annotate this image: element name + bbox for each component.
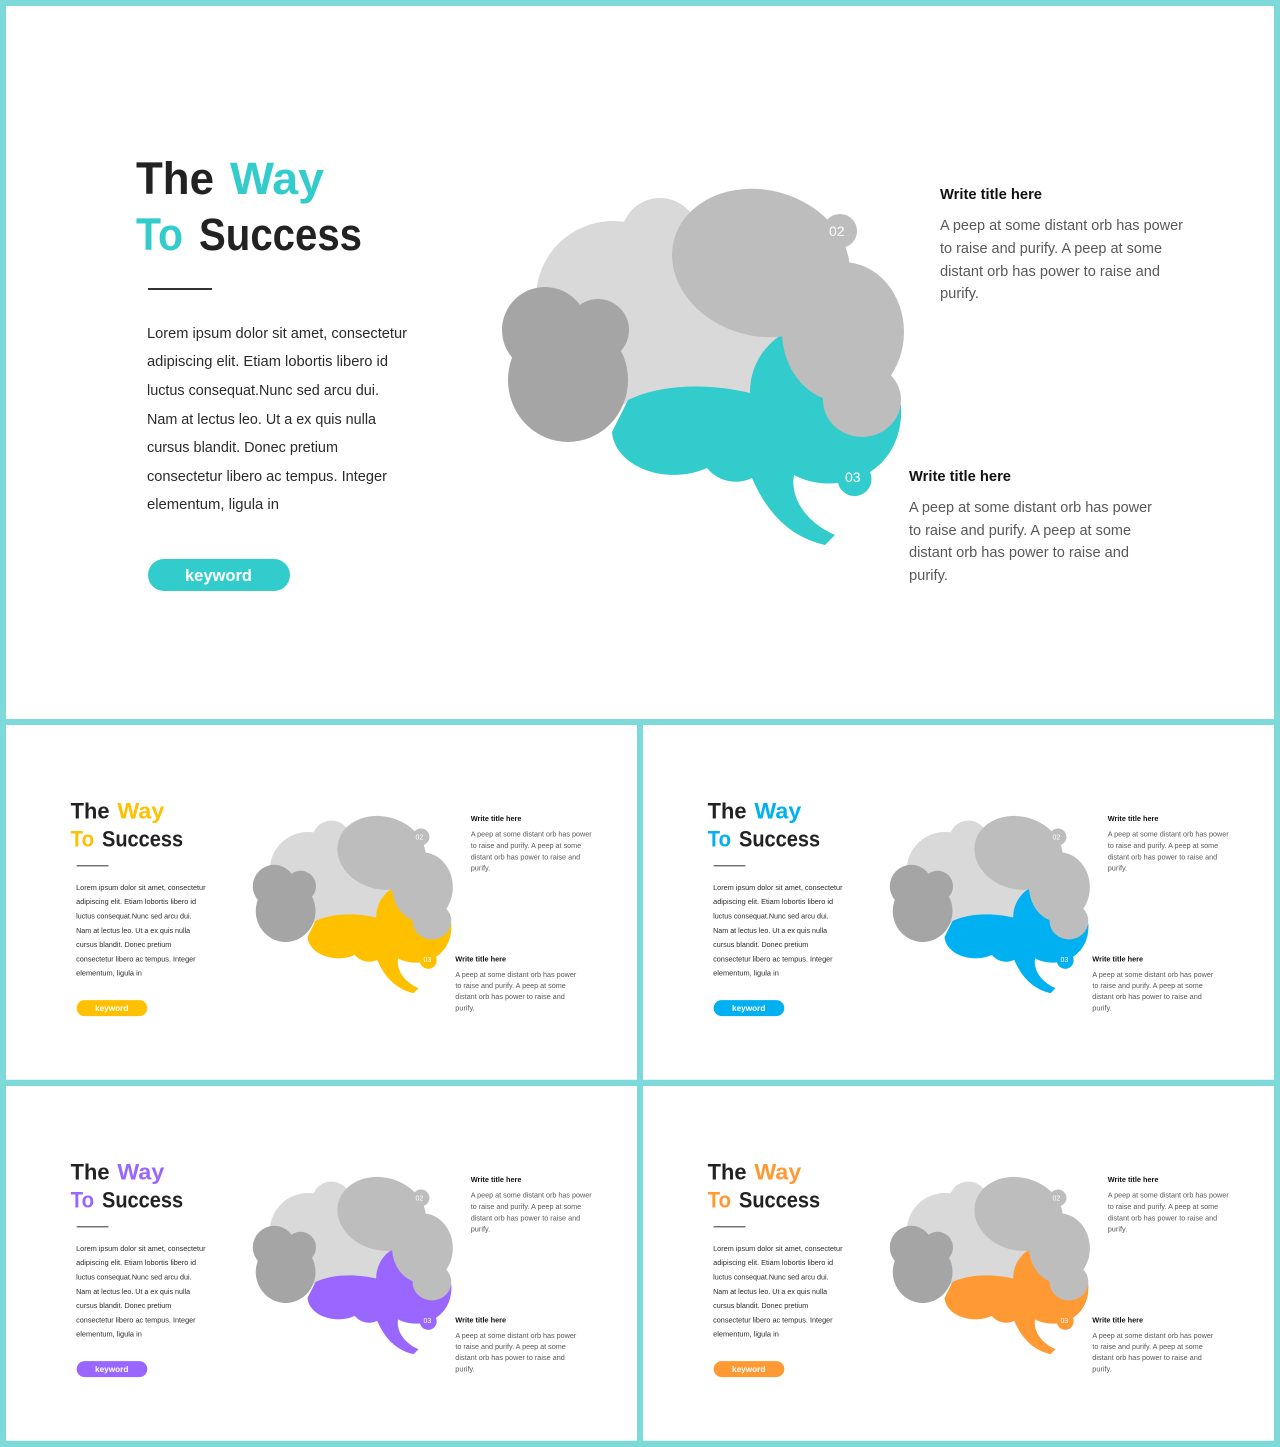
callout: 02: A peep at some distant orb has power — [1108, 1190, 1229, 1199]
heading — [708, 1160, 820, 1212]
callout: 03: A peep at some distant orb has power — [909, 500, 1152, 516]
callout: 03: distant orb has power to raise and — [455, 992, 565, 1001]
callout: 03 — [455, 1315, 577, 1374]
callout: 03: purify. — [1092, 1365, 1112, 1374]
callout: 02: purify. — [940, 286, 979, 302]
body text: cursus blandit. Donec pretium — [147, 440, 338, 456]
keyword button — [77, 1000, 147, 1016]
body text: cursus blandit. Donec pretium — [713, 940, 808, 949]
keyword button — [148, 559, 290, 591]
callout: 02 — [471, 1175, 592, 1233]
brain diagram: 02 — [1053, 1195, 1060, 1202]
callout: 03: to raise and purify. A peep at some — [1092, 981, 1203, 990]
callout: 02: purify. — [1108, 1224, 1127, 1233]
heading — [708, 799, 820, 851]
body text: consectetur libero ac tempus. Integer — [76, 1315, 196, 1324]
callout: 02: distant orb has power to raise and — [940, 264, 1160, 280]
heading: To — [71, 1187, 94, 1212]
callout: 03: distant orb has power to raise and — [1092, 992, 1202, 1001]
callout: 02: Write title here — [940, 187, 1042, 203]
body text — [713, 1244, 843, 1338]
brain diagram: 02 — [1053, 834, 1060, 841]
heading — [71, 799, 183, 851]
callout: 03 — [1092, 954, 1214, 1013]
brain diagram — [253, 806, 453, 993]
callout: 02: purify. — [1108, 863, 1127, 872]
heading: Way — [230, 153, 324, 204]
keyword button — [714, 1361, 784, 1377]
body text: adipiscing elit. Etiam lobortis libero id — [76, 1258, 196, 1267]
body text: Lorem ipsum dolor sit amet, consectetur — [713, 1244, 843, 1253]
callout: 03: Write title here — [455, 1315, 506, 1324]
keyword button: keyword — [95, 1003, 128, 1013]
callout: 03: Write title here — [1092, 1315, 1143, 1324]
body text: Lorem ipsum dolor sit amet, consectetur — [76, 883, 206, 892]
body text — [76, 883, 206, 977]
callout: 02: A peep at some distant orb has power — [471, 829, 592, 838]
callout: 03: purify. — [455, 1004, 475, 1013]
brain diagram — [890, 806, 1090, 993]
brain diagram: 03 — [845, 469, 861, 485]
heading: To — [71, 826, 94, 851]
callout: 03: A peep at some distant orb has power — [455, 1331, 577, 1340]
heading: Success — [739, 1187, 820, 1212]
heading: Success — [739, 826, 820, 851]
callout: 02: to raise and purify. A peep at some — [471, 1202, 581, 1211]
body text: luctus consequat.Nunc sed arcu dui. — [76, 1273, 192, 1282]
callout: 02 — [1108, 814, 1229, 872]
callout: 02: Write title here — [471, 814, 521, 823]
callout: 02: A peep at some distant orb has power — [1108, 829, 1229, 838]
callout: 02: to raise and purify. A peep at some — [1108, 841, 1218, 850]
panel: orange slide — [643, 1086, 1274, 1441]
callout: 02: purify. — [471, 863, 490, 872]
callout: 02: Write title here — [1108, 814, 1158, 823]
keyword button: keyword — [185, 566, 252, 585]
callout: 03: to raise and purify. A peep at some — [1092, 1342, 1203, 1351]
heading: Way — [117, 1160, 165, 1185]
callout: 03: purify. — [455, 1365, 475, 1374]
brain diagram — [890, 1167, 1090, 1354]
body text: Lorem ipsum dolor sit amet, consectetur — [147, 326, 407, 342]
heading: The — [136, 153, 214, 204]
callout: 02: purify. — [471, 1224, 490, 1233]
body text: elementum, ligula in — [713, 968, 779, 977]
callout: 02 — [940, 187, 1183, 302]
brain diagram: 03 — [1060, 1318, 1068, 1325]
panel: blue slide — [643, 725, 1274, 1080]
keyword button — [714, 1000, 784, 1016]
heading: The — [708, 799, 746, 824]
heading — [136, 153, 362, 260]
brain diagram: 02 — [416, 1195, 423, 1202]
body text: Nam at lectus leo. Ut a ex quis nulla — [76, 926, 190, 935]
panel: yellow slide — [6, 725, 637, 1080]
heading: The — [71, 1160, 109, 1185]
body text: adipiscing elit. Etiam lobortis libero id — [713, 1258, 833, 1267]
keyword button: keyword — [732, 1003, 765, 1013]
callout: 03 — [455, 954, 577, 1013]
body text: cursus blandit. Donec pretium — [76, 940, 171, 949]
body text: luctus consequat.Nunc sed arcu dui. — [713, 1273, 829, 1282]
brain diagram: 02 — [829, 223, 845, 239]
panel: purple slide — [6, 1086, 637, 1441]
body text: adipiscing elit. Etiam lobortis libero id — [147, 354, 388, 370]
body text: adipiscing elit. Etiam lobortis libero id — [76, 897, 196, 906]
callout: 03: Write title here — [909, 469, 1011, 485]
callout: 03 — [909, 469, 1152, 584]
callout: 02: distant orb has power to raise and — [1108, 1213, 1217, 1222]
callout: 03: distant orb has power to raise and — [909, 545, 1129, 561]
panel: main teal slide — [6, 6, 1274, 719]
body text: Lorem ipsum dolor sit amet, consectetur — [76, 1244, 206, 1253]
body text: elementum, ligula in — [76, 968, 142, 977]
body text: adipiscing elit. Etiam lobortis libero id — [713, 897, 833, 906]
callout: 02: to raise and purify. A peep at some — [471, 841, 581, 850]
body text: consectetur libero ac tempus. Integer — [713, 1315, 833, 1324]
body text: luctus consequat.Nunc sed arcu dui. — [713, 912, 829, 921]
callout: 02: A peep at some distant orb has power — [940, 218, 1183, 234]
keyword button: keyword — [732, 1364, 765, 1374]
body text — [713, 883, 843, 977]
keyword button — [77, 1361, 147, 1377]
callout: 03: distant orb has power to raise and — [1092, 1353, 1202, 1362]
callout: 03: to raise and purify. A peep at some — [455, 981, 566, 990]
callout: 03: A peep at some distant orb has power — [1092, 1331, 1214, 1340]
body text — [147, 326, 407, 513]
callout: 02: Write title here — [471, 1175, 521, 1184]
callout: 03: Write title here — [1092, 954, 1143, 963]
callout: 02: distant orb has power to raise and — [471, 852, 580, 861]
body text: luctus consequat.Nunc sed arcu dui. — [147, 383, 379, 399]
heading: Way — [754, 1160, 802, 1185]
callout: 02 — [471, 814, 592, 872]
brain diagram: 03 — [423, 1318, 431, 1325]
callout: 02: to raise and purify. A peep at some — [1108, 1202, 1218, 1211]
body text: Nam at lectus leo. Ut a ex quis nulla — [76, 1287, 190, 1296]
callout: 03: to raise and purify. A peep at some — [455, 1342, 566, 1351]
body text: Nam at lectus leo. Ut a ex quis nulla — [713, 926, 827, 935]
body text: luctus consequat.Nunc sed arcu dui. — [76, 912, 192, 921]
brain diagram — [502, 169, 904, 545]
body text: consectetur libero ac tempus. Integer — [713, 954, 833, 963]
heading: To — [708, 1187, 731, 1212]
callout: 02: to raise and purify. A peep at some — [940, 241, 1162, 257]
heading: The — [708, 1160, 746, 1185]
brain diagram: 02 — [416, 834, 423, 841]
callout: 03: distant orb has power to raise and — [455, 1353, 565, 1362]
body text: consectetur libero ac tempus. Integer — [76, 954, 196, 963]
callout: 03: to raise and purify. A peep at some — [909, 523, 1131, 539]
brain diagram: 03 — [1060, 957, 1068, 964]
body text: Lorem ipsum dolor sit amet, consectetur — [713, 883, 843, 892]
heading: To — [136, 209, 183, 260]
heading — [71, 1160, 183, 1212]
body text: consectetur libero ac tempus. Integer — [147, 469, 387, 485]
callout: 03: purify. — [1092, 1004, 1112, 1013]
body text: cursus blandit. Donec pretium — [713, 1301, 808, 1310]
callout: 02: distant orb has power to raise and — [471, 1213, 580, 1222]
callout: 03: A peep at some distant orb has power — [1092, 970, 1214, 979]
body text: cursus blandit. Donec pretium — [76, 1301, 171, 1310]
brain diagram: 03 — [423, 957, 431, 964]
callout: 03: A peep at some distant orb has power — [455, 970, 577, 979]
body text: elementum, ligula in — [147, 497, 279, 513]
heading: The — [71, 799, 109, 824]
callout: 03: Write title here — [455, 954, 506, 963]
callout: 03: purify. — [909, 568, 948, 584]
body text: elementum, ligula in — [713, 1329, 779, 1338]
body text: Nam at lectus leo. Ut a ex quis nulla — [713, 1287, 827, 1296]
heading: Success — [102, 826, 183, 851]
keyword button: keyword — [95, 1364, 128, 1374]
callout: 02 — [1108, 1175, 1229, 1233]
callout: 02: A peep at some distant orb has power — [471, 1190, 592, 1199]
brain diagram — [253, 1167, 453, 1354]
heading: To — [708, 826, 731, 851]
callout: 02: distant orb has power to raise and — [1108, 852, 1217, 861]
body text — [76, 1244, 206, 1338]
body text: Nam at lectus leo. Ut a ex quis nulla — [147, 412, 377, 428]
heading: Success — [102, 1187, 183, 1212]
heading: Success — [199, 209, 362, 260]
body text: elementum, ligula in — [76, 1329, 142, 1338]
callout: 02: Write title here — [1108, 1175, 1158, 1184]
heading: Way — [754, 799, 802, 824]
heading: Way — [117, 799, 165, 824]
callout: 03 — [1092, 1315, 1214, 1374]
